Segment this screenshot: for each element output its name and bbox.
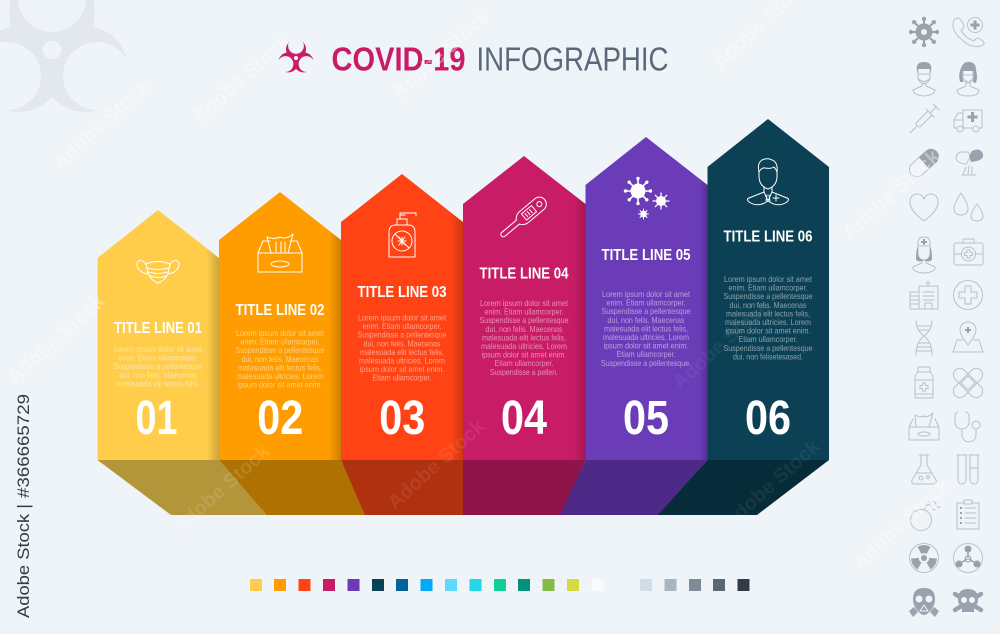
body text 02 [236,328,325,390]
body text 05: Suspendisse a pellentesque [602,306,691,316]
watermarks: Adobe Stock [849,475,955,574]
body text 04: enim. Etiam ullamcorper. [484,307,564,317]
icon: skull and crossbones [955,589,981,612]
icon: clipboard [957,500,979,529]
icon: thermometer [497,194,549,241]
panel: column 01 [98,210,219,460]
icon: capsule [906,146,942,180]
watermarks: Adobe Stock [389,5,495,104]
icon: virus particles [624,177,669,219]
body text 05 [601,289,691,368]
panel: column 02 [219,192,341,460]
body text 04: Etiam ullamcorper. [494,358,554,368]
icon: map pin [953,322,983,352]
watermarks: Adobe Stock [169,440,275,539]
body text 05: malesuada elit lectus felis, [604,323,688,333]
colour palette [250,579,750,591]
icon column [906,17,993,617]
icon: sanitizer bottle [389,213,416,257]
heading: COVID-19: COVID-19 [332,40,466,78]
icon: woman with mask [957,62,979,96]
body text 06: Etiam ullamcorper. [738,334,798,344]
body text 06: dui, non felis. Maecenas [730,300,806,310]
number 03: 03 [379,392,425,445]
icon: ambulance [954,110,982,132]
body text 06: ipsum dolor sit amet enim. [726,326,810,336]
number 05: 05 [623,392,669,445]
watermarks: Adobe Stock [384,415,490,514]
body text 02: Lorem ipsum dolor sit amet [236,328,325,338]
body text 04: Suspendisse a pellen. [490,367,558,377]
title 05: TITLE LINE 05 [602,247,691,264]
body text 03: malesuada elit lectus felis, [360,347,444,357]
stock credit: #366665729 [14,394,33,498]
icon: stethoscope [955,412,980,442]
body text 01: enim. Etiam ullamcorper. [118,353,198,363]
body text 01: dui, non felis. Maecenas [120,370,196,380]
icon: tissue box small [909,413,939,440]
body text 05: Suspendisse a pellentesque. [601,358,691,368]
body text 06: malesuada elit lectus felis, [726,308,810,318]
number 04: 04 [501,392,547,445]
body text 06: Suspendisse a pellentesque [724,343,813,353]
icon: biohazard [278,38,314,72]
body text 05: malesuada ultricies. Lorem [603,332,689,342]
body text 04: ipsum dolor sit amet enim. [482,350,566,360]
body text 06: Lorem ipsum dolor sit amet [724,274,813,284]
title 02: TITLE LINE 02 [236,302,325,319]
number 06: 06 [745,392,791,445]
body text 02: malesuada elit lectus felis, [238,362,322,372]
body text 03 [358,312,447,383]
body text 03: Suspendisse a pellentesque [358,330,447,340]
body text 03: malesuada ultricies. Lorem [359,356,445,366]
body text 05: Lorem ipsum dolor sit amet [602,289,691,299]
body text 06: Suspendisse a pellentesque [724,291,813,301]
body text 02: malesuada ultricies. Lorem [237,371,323,381]
icon: doctor [748,159,788,205]
icon: medical cross circle [954,280,982,310]
title 06: TITLE LINE 06 [724,229,813,246]
body text 01: Suspendisse a pellentesque [114,361,203,371]
icon: chemical [954,544,982,572]
body text 04: Lorem ipsum dolor sit amet [480,298,569,308]
body text 04: dui, non felis. Maecenas [486,324,562,334]
icon: gas mask [909,588,939,617]
title [278,38,668,78]
panel: column 04 [463,156,586,460]
body text 04: malesuada elit lectus felis, [482,332,566,342]
title 03: TITLE LINE 03 [358,284,447,301]
body text 06: dui, non felisetesased. [733,351,803,361]
body text 06: enim. Etiam ullamcorper. [728,283,808,293]
long shadows under the columns [98,460,829,515]
icon: test tubes [957,455,979,484]
icon: virus [909,17,939,47]
icon: face mask [137,260,179,283]
body text 02: Suspendisse a pellentesque [236,345,325,355]
watermarks: Adobe Stock [49,75,155,174]
body text 03: Etiam ullamcorper. [372,373,432,383]
watermarks: Adobe Stock [839,145,945,244]
icon: drops [954,193,983,221]
watermarks: Adobe Stock [719,435,825,534]
icon: hospital [910,281,938,309]
body text 02: dui, non felis. Maecenas [242,354,318,364]
panel: column 03 [341,174,463,460]
body text 02: ipsum dolor sit amet enim. [238,380,322,390]
icon: heart [910,194,938,221]
icon: bandages [943,358,993,408]
icon: nurse [913,237,935,273]
body text 04: malesuada ultricies. Lorem [481,341,567,351]
stock credit name: Adobe Stock | [14,504,33,618]
icon: tissue box [258,234,302,272]
icon: flask [912,455,936,484]
watermarks: Adobe Stock [669,295,775,394]
biohazard watermark [0,0,131,112]
icon: medicine bottle [915,367,933,398]
icon: DNA [916,321,932,355]
body text 01: malesuada elit lectus felis. [116,378,200,388]
body text 01: Lorem ipsum dolor sit amet [114,344,203,354]
body text 03: enim. Etiam ullamcorper. [362,321,442,331]
body text 05: ipsum dolor sit amet enim. [604,341,688,351]
number 02: 02 [257,392,303,445]
icon: man with mask [913,62,935,96]
icon: open capsule [956,150,983,175]
icon: phone [953,18,984,47]
body text 03: Lorem ipsum dolor sit amet [358,312,447,322]
title 04: TITLE LINE 04 [480,266,569,283]
body text 04 [480,298,569,377]
body text 03: dui, non felis. Maecenas [364,338,440,348]
title 01: TITLE LINE 01 [114,320,202,337]
body text 06: malesuada ultricies. Lorem [725,317,811,327]
icon: radiation [910,544,938,572]
number 01: 01 [136,392,178,445]
body text 05: dui, non felis. Maecenas [608,315,684,325]
body text 03: ipsum dolor sit amet enim. [360,364,444,374]
panel: column 05 [586,137,708,460]
icon: first aid kit [954,239,983,265]
body text 04: Suspendisse a pellentesque [480,315,569,325]
icon: syringe [910,104,939,133]
watermarks: Adobe Stock [189,30,295,129]
heading: INFOGRAPHIC: INFOGRAPHIC [476,40,668,78]
icon: bomb [910,501,940,530]
body text 06 [724,274,813,361]
body text 05: Etiam ullamcorper. [616,349,676,359]
body text 02: enim. Etiam ullamcorper. [240,337,320,347]
watermarks: Adobe Stock [4,290,110,389]
panel: column 06 [708,119,829,460]
body text 05: enim. Etiam ullamcorper. [606,298,686,308]
body text 01 [114,344,203,388]
